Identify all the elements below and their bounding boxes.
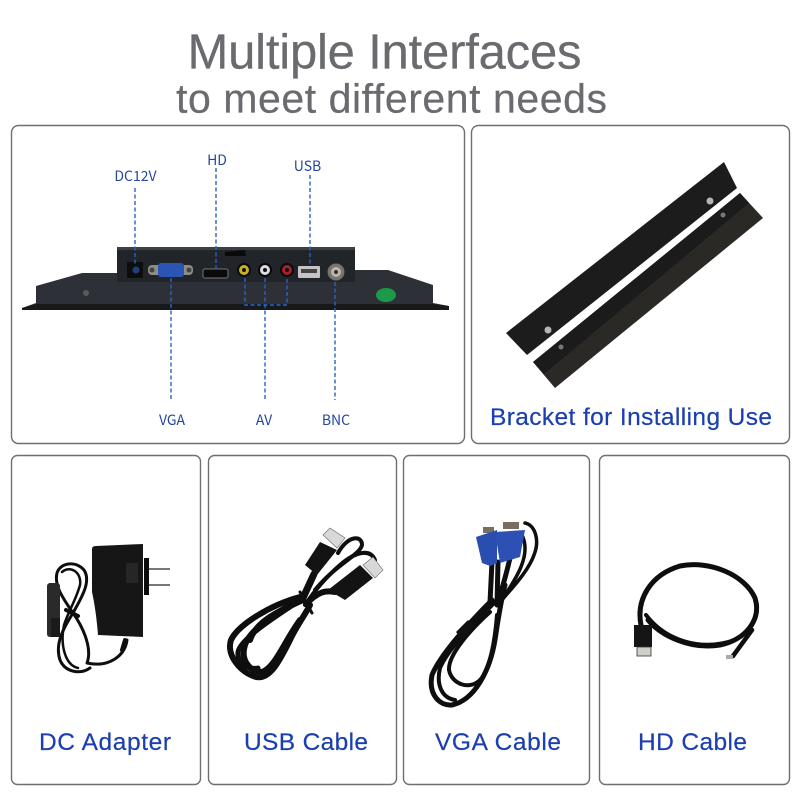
title: to meet different needs bbox=[176, 76, 607, 122]
caption: DC adapter: DC Adapter bbox=[39, 729, 171, 756]
panel: bracket bbox=[472, 126, 790, 444]
caption: bracket: Bracket for Installing Use bbox=[490, 404, 772, 431]
label: VGA: VGA bbox=[159, 410, 185, 430]
icon: USB cable coil bbox=[230, 528, 383, 677]
panel: monitor interfaces bbox=[12, 126, 464, 444]
panel: USB cable bbox=[208, 456, 396, 784]
panel: DC adapter bbox=[12, 456, 200, 784]
monitor rear view bbox=[22, 247, 449, 310]
port: USB bbox=[298, 266, 320, 278]
icon: HD cable coil bbox=[634, 565, 757, 659]
port: VGA bbox=[148, 263, 193, 277]
port: HD bbox=[203, 269, 228, 278]
label: BNC: BNC bbox=[322, 410, 350, 430]
title bbox=[176, 26, 607, 122]
label: USB: USB bbox=[294, 156, 321, 176]
label: HD: HD bbox=[207, 150, 227, 170]
panel: VGA cable bbox=[404, 456, 590, 784]
panel: HD cable bbox=[600, 456, 790, 784]
icon: VGA cable coil bbox=[431, 522, 537, 705]
title: Multiple Interfaces bbox=[188, 26, 582, 80]
caption: VGA cable: VGA Cable bbox=[435, 729, 561, 756]
label: DC12V: DC12V bbox=[114, 166, 158, 186]
label: AV: AV bbox=[256, 410, 273, 430]
icon: mounting brackets bbox=[506, 162, 763, 388]
port: BNC bbox=[328, 264, 344, 280]
label lines bbox=[135, 168, 335, 400]
icon: power adapter bbox=[47, 544, 170, 672]
caption: USB cable: USB Cable bbox=[244, 729, 368, 756]
port: DC jack bbox=[127, 262, 143, 278]
port: AV bbox=[237, 263, 294, 277]
caption: HD cable: HD Cable bbox=[638, 729, 747, 756]
